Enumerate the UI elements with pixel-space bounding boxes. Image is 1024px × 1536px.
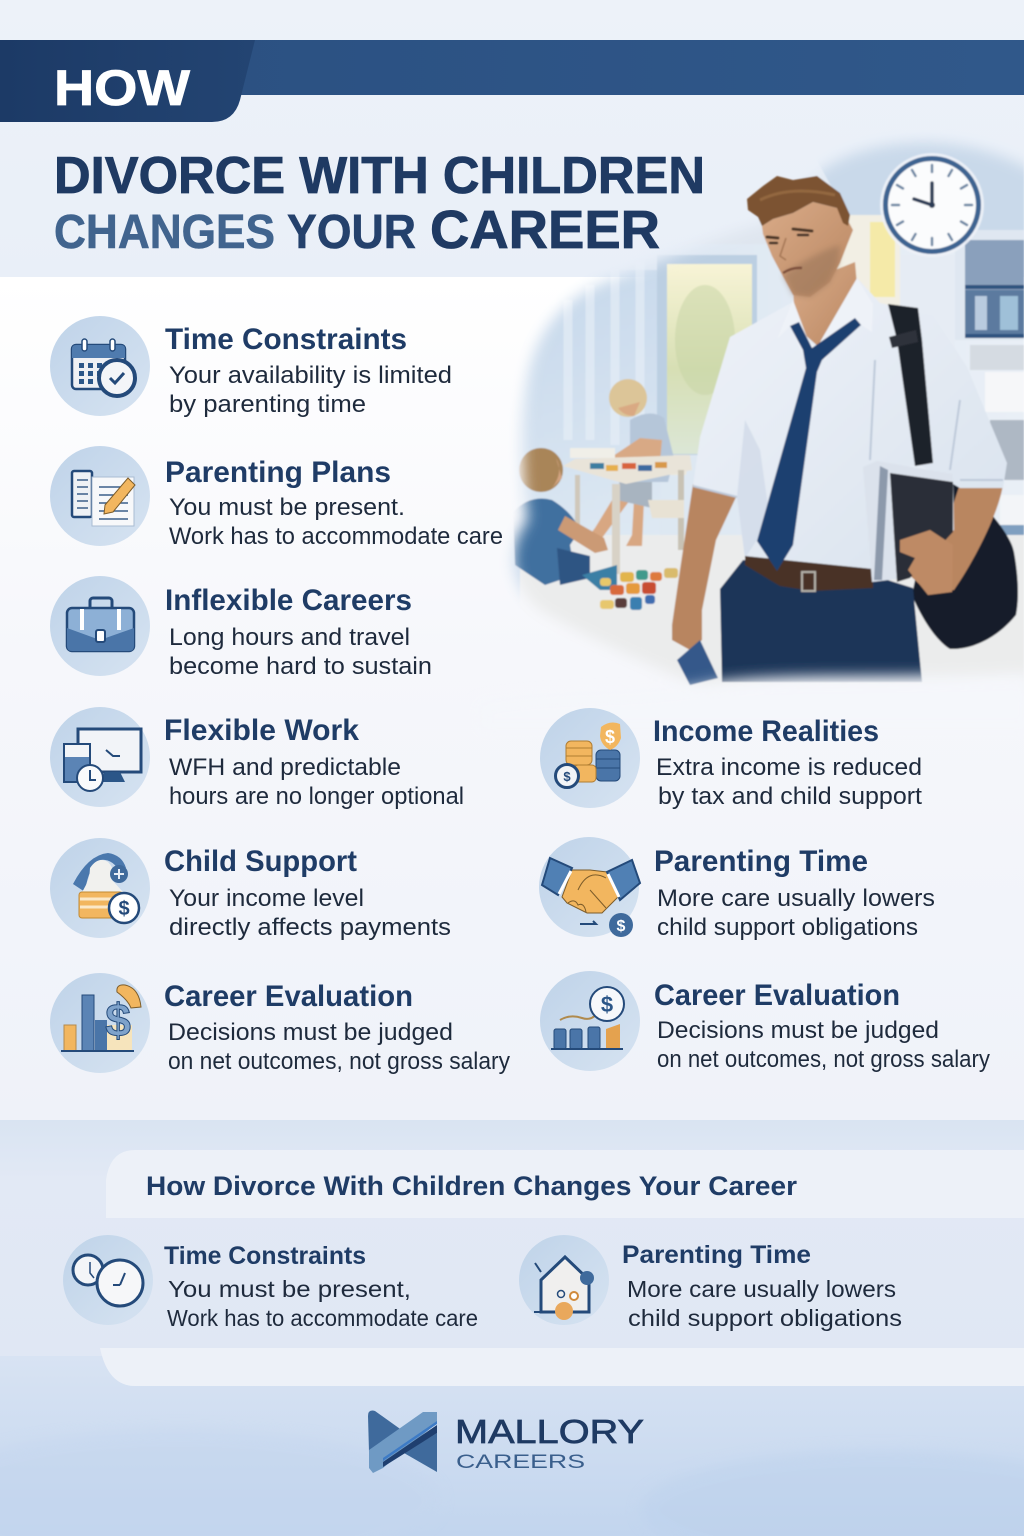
toys on floor — [582, 565, 678, 610]
icon: coin stacks — [540, 708, 640, 808]
item: Income Realities: Income Realities — [653, 715, 879, 748]
item: Income Realities — [540, 708, 922, 810]
heading: main title — [54, 147, 705, 260]
summary item: Time Constraints: You must be present, — [168, 1276, 411, 1302]
item: Child Support — [50, 838, 451, 941]
icon: briefcase — [50, 576, 150, 676]
icon: handshake: $ — [617, 918, 626, 935]
item: Parenting Time: child support obligations — [657, 914, 918, 941]
summary item: Parenting Time: Parenting Time — [622, 1241, 811, 1269]
illustration: father leaving home with children playing — [508, 138, 1024, 686]
head — [762, 202, 853, 297]
table with toys — [563, 448, 692, 574]
item: Career Evaluation (right): Career Evaluation — [654, 979, 900, 1012]
icon: bar chart with dollar: $ — [105, 994, 131, 1046]
messenger bag — [912, 456, 1018, 649]
icon: person with money: $ — [118, 898, 130, 920]
summary lower ribbon — [100, 1348, 1024, 1386]
child on floor — [513, 448, 608, 585]
summary item: Parenting Time — [519, 1235, 902, 1331]
item: Time Constraints: Your availability is limited — [169, 362, 452, 389]
logo: Mallory Careers: MALLORY — [455, 1413, 644, 1450]
item: Inflexible Careers: Long hours and travel — [169, 624, 410, 651]
item: Career Evaluation (left) — [50, 973, 510, 1075]
shirt — [693, 278, 1007, 571]
heading: main title: CHANGES — [54, 206, 275, 259]
item: Career Evaluation (right): on net outcomes, not gross salary — [657, 1046, 990, 1073]
logo: Mallory Careers: CAREERS — [456, 1452, 585, 1473]
shoulder strap — [888, 304, 933, 466]
item: Parenting Time: Parenting Time — [654, 845, 868, 878]
summary heading: How Divorce With Children Changes Your Career — [146, 1171, 798, 1201]
summary item: Parenting Time: child support obligations — [628, 1305, 902, 1331]
item: Career Evaluation (right) — [540, 971, 990, 1073]
item: Child Support: directly affects payments — [169, 914, 451, 941]
item: Flexible Work: hours are no longer optional — [169, 783, 464, 810]
item: Inflexible Careers — [50, 576, 432, 680]
item: Time Constraints — [50, 316, 452, 418]
item: Flexible Work: WFH and predictable — [169, 754, 401, 781]
summary item: Time Constraints — [63, 1235, 478, 1331]
icon: rising bars and dollar — [540, 971, 640, 1071]
item: Parenting Plans: Parenting Plans — [165, 456, 391, 489]
summary item: Time Constraints: Time Constraints — [164, 1242, 366, 1270]
item: Inflexible Careers: become hard to sustain — [169, 653, 432, 680]
hair — [747, 176, 850, 226]
item: Child Support: Your income level — [169, 885, 364, 912]
hand on books — [900, 530, 953, 595]
item: Parenting Time: More care usually lowers — [657, 885, 935, 912]
room background — [500, 130, 1024, 710]
icon: bar chart with dollar — [50, 973, 150, 1073]
icon: monitor, phone and clock — [50, 707, 150, 807]
summary heading — [106, 1150, 1024, 1218]
trousers — [720, 560, 922, 682]
icon: handshake — [539, 837, 640, 937]
bag carried in hand — [677, 640, 718, 685]
left forearm — [672, 484, 737, 650]
icon: person with money — [50, 838, 150, 938]
item: Parenting Plans — [50, 446, 503, 550]
icon: documents and pencil — [50, 446, 150, 546]
heading: main title: YOUR — [287, 206, 416, 259]
item: Career Evaluation (left): on net outcomes, not gross salary — [168, 1048, 510, 1075]
books — [863, 461, 954, 582]
panel: summary — [63, 1150, 1024, 1386]
belt — [745, 556, 873, 591]
right forearm — [898, 484, 1003, 594]
item: Career Evaluation (left): Decisions must be judged — [168, 1019, 453, 1046]
item: Income Realities: Extra income is reduced — [656, 754, 922, 781]
summary item: Parenting Time: More care usually lowers — [627, 1276, 896, 1302]
summary item: Time Constraints: Work has to accommodate care — [167, 1305, 478, 1331]
icon: coin stacks: $ — [563, 769, 571, 784]
icon: coin stacks: $ — [605, 727, 615, 747]
item: Career Evaluation (right): Decisions must be judged — [657, 1017, 939, 1044]
icon: two clocks — [63, 1235, 153, 1325]
item: Flexible Work: Flexible Work — [164, 714, 359, 747]
tie — [757, 318, 861, 571]
neck — [793, 262, 860, 348]
logo mark — [368, 1411, 437, 1473]
man — [672, 176, 1007, 682]
child at table — [586, 379, 690, 546]
item: Inflexible Careers: Inflexible Careers — [165, 584, 412, 617]
wall clock — [880, 153, 984, 257]
item: Parenting Plans: You must be present. — [169, 494, 405, 521]
heading: main title: DIVORCE WITH CHILDREN — [54, 147, 705, 205]
logo: Mallory Careers — [368, 1411, 644, 1473]
icon: calendar and clock — [50, 316, 150, 416]
heading: main title: CAREER — [430, 200, 660, 260]
item: Career Evaluation (left): Career Evaluation — [164, 980, 413, 1013]
icon: rising bars and dollar: $ — [601, 992, 613, 1017]
item: Child Support: Child Support — [164, 845, 357, 878]
item: Parenting Plans: Work has to accommodate care — [169, 523, 503, 550]
bottom fade — [480, 672, 1024, 730]
item: Income Realities: by tax and child support — [658, 783, 922, 810]
item: Time Constraints: Time Constraints — [165, 323, 407, 356]
header band — [0, 40, 1024, 122]
item: Flexible Work — [50, 707, 464, 810]
item: Parenting Time — [539, 837, 935, 941]
item: Time Constraints: by parenting time — [169, 391, 366, 418]
heading: HOW: HOW — [54, 60, 191, 116]
icon: house with family — [519, 1235, 609, 1325]
collar — [777, 278, 873, 356]
